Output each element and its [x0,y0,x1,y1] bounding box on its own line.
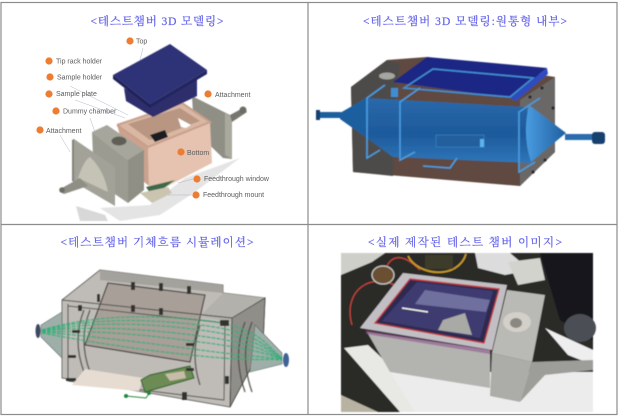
chamber side [367,332,490,388]
callout: Top [126,37,147,46]
inner rectangular part [436,135,484,147]
callout: Attachment left [36,126,81,135]
translucent chamber with flow [36,270,289,407]
callout: Sample holder: Sample holder [57,74,103,82]
panel: fabricated chamber photo [341,235,596,412]
bolts [66,282,229,400]
title: 3D modelling: <테스트챔버 3D 모델링> [90,14,224,28]
lid [393,57,548,101]
chamber outer body [351,57,555,186]
photo of chamber [341,253,596,412]
right attachment [192,96,247,159]
cylinder chamber drawing [316,57,605,186]
inlet cones [36,312,289,372]
panel: 3D modelling exploded view [36,14,270,221]
callouts with labels [36,37,270,199]
callout: Attachment right [204,90,250,99]
panel: 3D modelling cylinder interior [316,14,605,186]
callout: Top: Top [136,38,147,46]
viewing window frame [360,273,507,350]
callout: Tip rack holder: Tip rack holder [56,58,103,66]
photo background [341,253,593,412]
dummy chamber [92,125,144,203]
left attachment [59,139,115,206]
callout: Feedthrough mount: Feedthrough mount [203,192,264,199]
title: gas flow simulation: <테스트챔버 기체흐름 시뮬레이션> [60,235,254,249]
top lid [113,44,207,117]
cylinder body [316,88,605,163]
bottom plate [72,369,143,391]
callout: Bottom: Bottom [187,150,209,157]
callout: Attachment right: Attachment [215,92,250,99]
green flow streamlines [42,317,282,360]
callout: Feedthrough window: Feedthrough window [204,176,270,183]
leader lines [60,48,193,195]
exploded chamber drawing [59,44,247,221]
green feedthrough part [124,366,194,398]
bottom chamber [117,103,212,190]
callout: Tip rack holder [45,57,103,66]
feedthrough window and mount [140,180,175,203]
title: cylinder interior: <테스트챔버 3D 모델링:원통형 내부> [363,14,567,28]
callout: Sample plate: Sample plate [56,91,97,98]
callout: Bottom [177,148,209,157]
callout: Dummy chamber: Dummy chamber [63,108,117,116]
callout: Sample holder [46,73,103,82]
main housing [62,270,265,407]
callout: Attachment left: Attachment [46,128,81,135]
panel: gas flow simulation [36,235,289,407]
inner cylinder rings [78,310,252,392]
frame outlines [367,85,540,172]
wires [350,254,466,325]
title: fabricated chamber: <실제 제작된 테스트 챔버 이미지> [368,235,562,249]
